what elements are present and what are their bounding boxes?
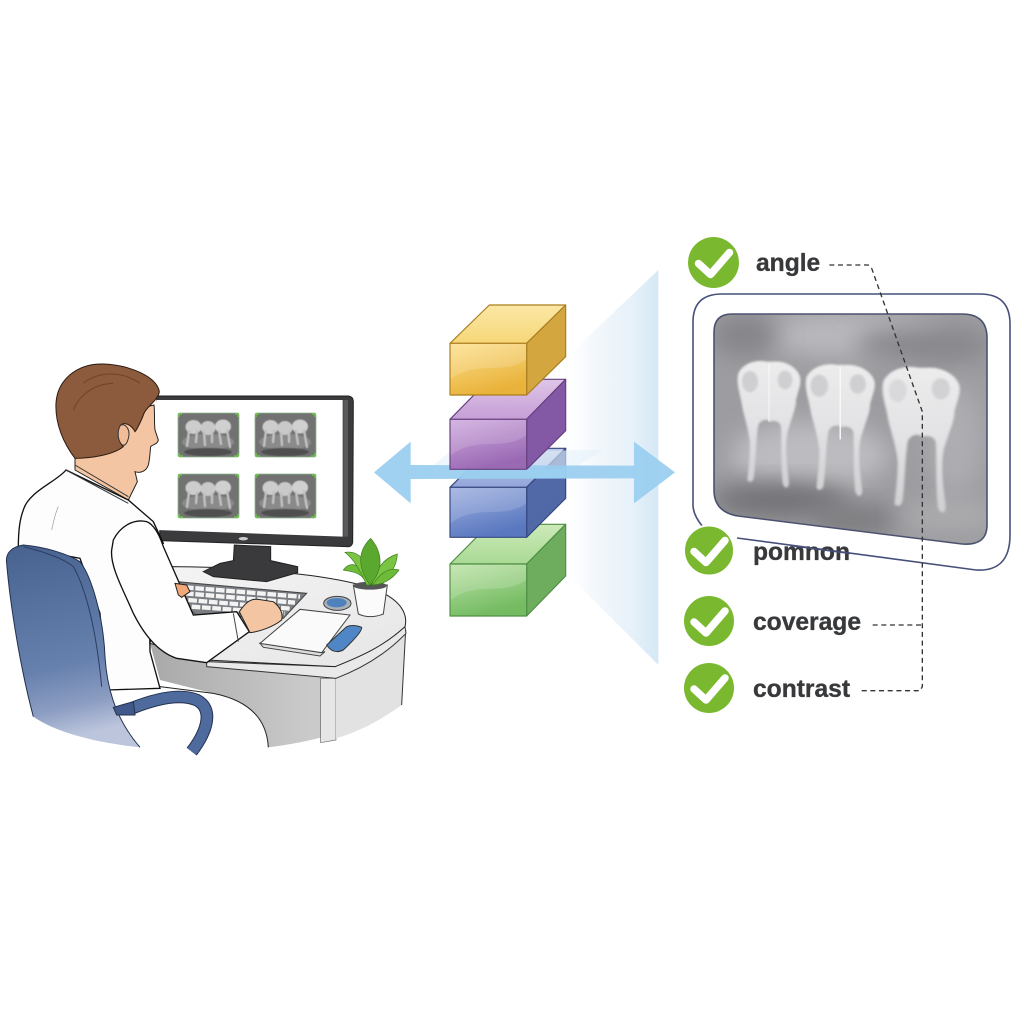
tooth one <box>738 361 800 488</box>
x-ray thumbnails on monitor <box>178 413 316 518</box>
dashed leader lines <box>829 265 922 691</box>
x-ray image <box>710 313 1000 546</box>
checklist <box>684 237 861 713</box>
item: coverage <box>684 596 861 646</box>
paper notepad <box>260 609 350 656</box>
light beam <box>557 270 658 665</box>
smartphone <box>327 625 362 652</box>
item: coverage: coverage <box>753 609 861 636</box>
desk <box>150 567 406 747</box>
tooth two <box>806 364 875 496</box>
item: angle <box>688 237 820 288</box>
x-ray card <box>693 294 1010 570</box>
card outline <box>693 294 1010 570</box>
green block <box>450 524 566 616</box>
arrow shaft front highlight <box>527 468 566 478</box>
keyboard <box>177 582 307 618</box>
item: pomnon: pomnon <box>753 539 850 566</box>
pale glass plane <box>432 450 603 467</box>
monitor <box>147 396 353 582</box>
teeth <box>738 361 960 513</box>
blue block <box>450 448 566 537</box>
double-headed arrow <box>374 442 675 503</box>
item: contrast <box>684 663 850 713</box>
item: angle: angle <box>756 250 820 277</box>
panel: centre stacked layers <box>374 270 675 665</box>
hands <box>175 583 282 633</box>
purple block <box>450 379 566 469</box>
item: contrast: contrast <box>753 676 850 703</box>
mouse <box>324 596 351 610</box>
monitor screen strip <box>343 400 348 537</box>
head <box>56 364 159 500</box>
trousers <box>113 687 268 752</box>
panel: clinician at workstation <box>6 364 406 752</box>
potted plant <box>343 538 399 617</box>
tooth three <box>883 367 960 513</box>
yellow block <box>450 305 566 395</box>
x-ray inner border <box>714 314 987 544</box>
white coat <box>18 465 249 690</box>
item: pomnon <box>684 526 850 576</box>
office chair <box>6 545 207 752</box>
